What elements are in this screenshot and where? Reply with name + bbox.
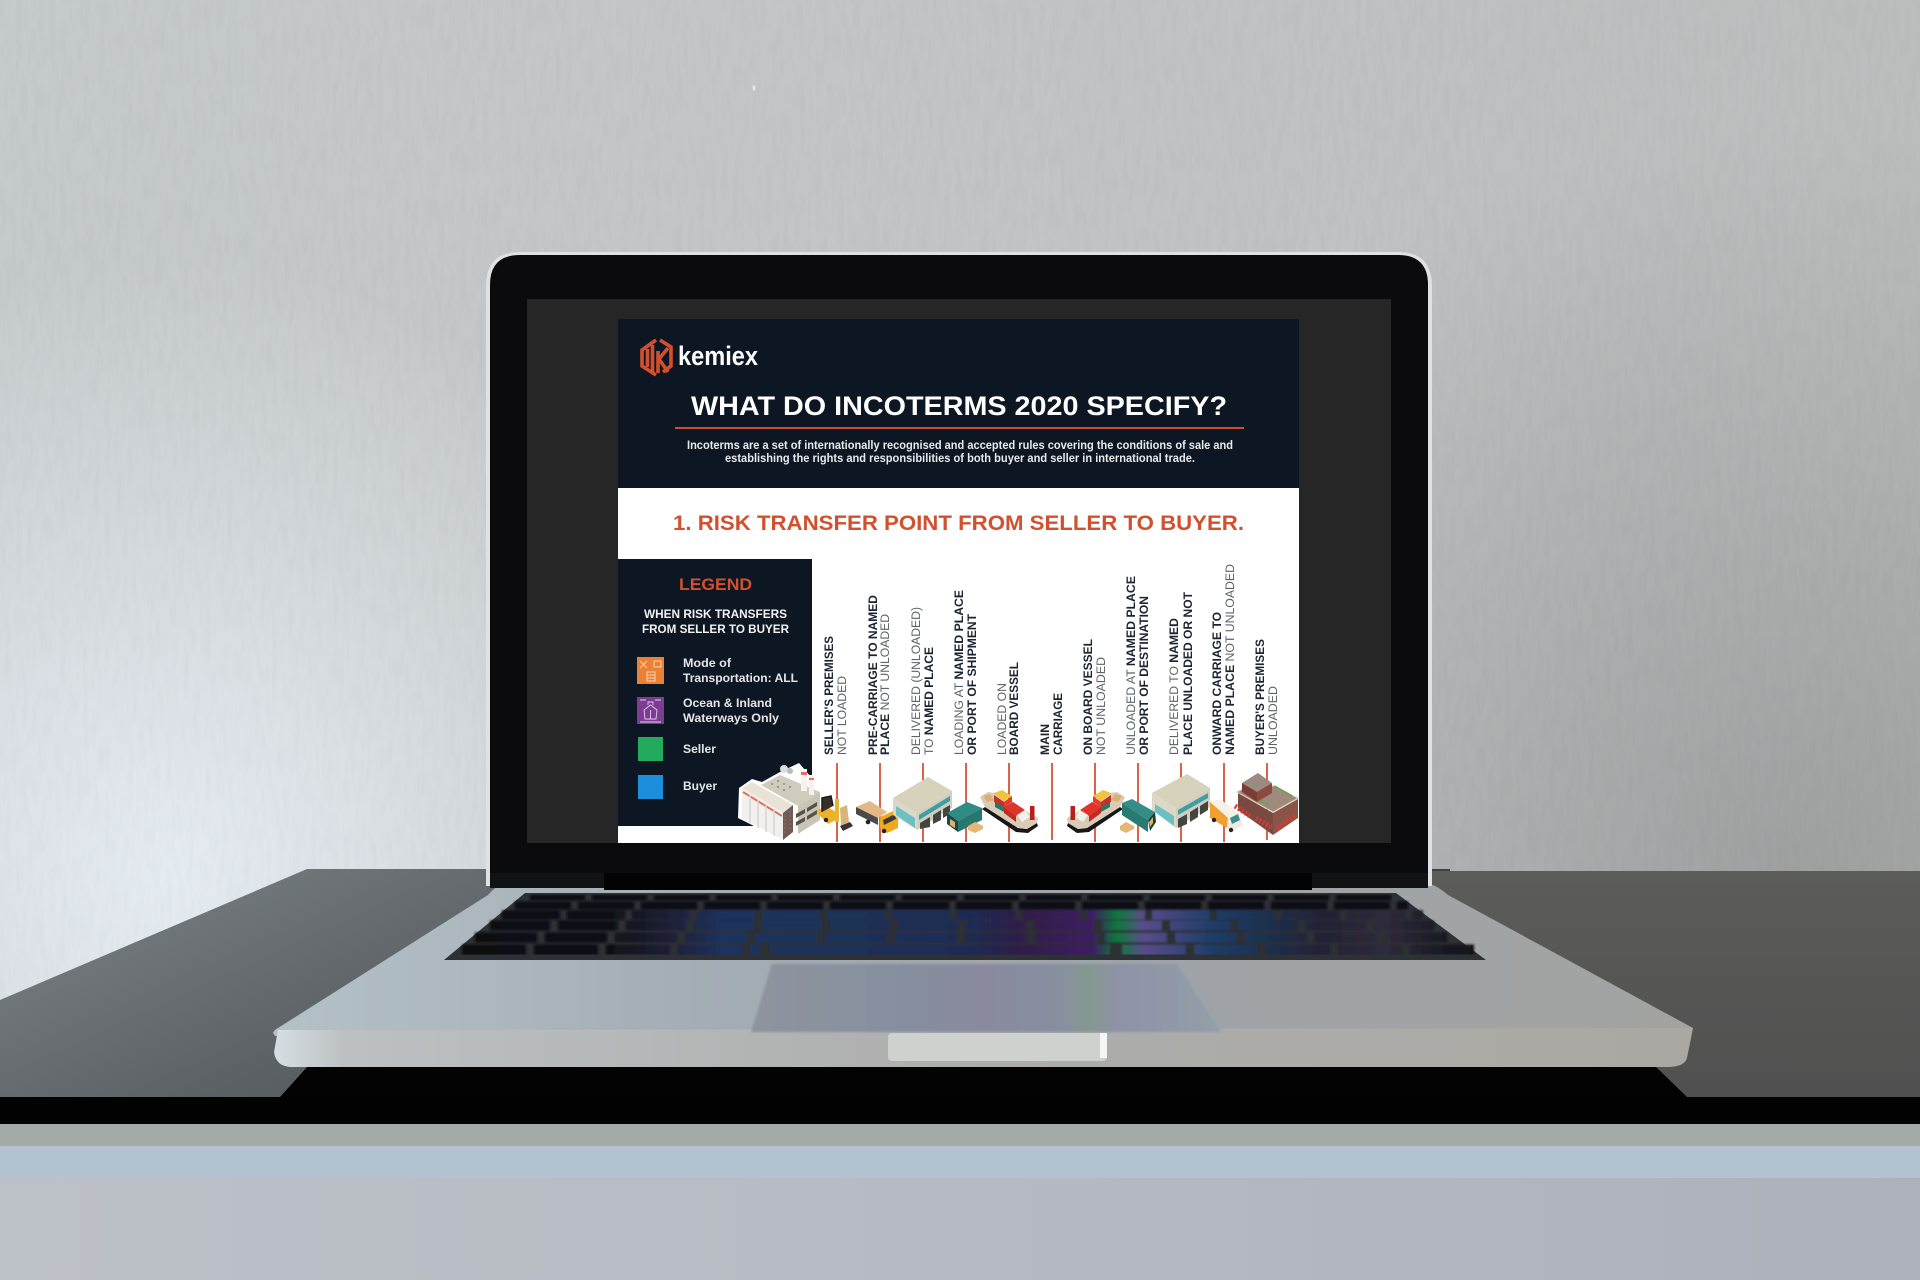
legend subtitle: WHEN RISK TRANSFERS <box>644 607 787 621</box>
illustration: shipping container (destination) <box>1120 799 1156 833</box>
legend subtitle: FROM SELLER TO BUYER <box>642 622 789 636</box>
laptop base <box>273 885 1693 1067</box>
risk transfer marker lines <box>837 763 1267 842</box>
column label: pre-carriage: PRE-CARRIAGE TO NAMED <box>868 595 880 755</box>
display background <box>527 299 1391 843</box>
legend text: all modes <box>683 656 798 685</box>
illustration: buyer's store <box>1235 773 1298 835</box>
column label: loading at named place <box>954 590 979 755</box>
intro text: Incoterms are a set of internationally recognised and accepted rules covering the conditions of sale and <box>687 439 1233 452</box>
column label: buyer's premises <box>1255 639 1280 755</box>
legend panel <box>618 559 812 826</box>
column label: delivered to named place: DELIVERED TO NAMED <box>1169 618 1181 755</box>
legend text: all modes: Transportation: ALL <box>683 671 798 685</box>
illustration: warehouse (origin) <box>893 777 952 830</box>
intro text: establishing the rights and responsibilities of both buyer and seller in international trade. <box>725 452 1195 465</box>
swatch: seller <box>638 737 663 761</box>
desk top <box>0 869 1920 1097</box>
wordmark: kemiex <box>678 341 758 371</box>
legend text: waterways: Waterways Only <box>683 711 779 725</box>
column label: delivered to named place <box>1169 592 1195 755</box>
column label: on board vessel: ON BOARD VESSEL <box>1083 639 1095 755</box>
column label: seller's premises <box>824 636 849 755</box>
logo <box>642 340 758 375</box>
column label: loaded on board <box>997 662 1021 755</box>
icon: ocean and inland waterways <box>637 697 664 724</box>
column label: unloaded at named place <box>1126 576 1151 755</box>
title: WHAT DO INCOTERMS 2020 SPECIFY? <box>691 391 1227 421</box>
illustration: cargo ship (discharge) <box>1067 790 1125 833</box>
icon: kemiex hexagon <box>642 340 671 375</box>
illustration: warehouse (destination) <box>1152 774 1210 828</box>
front notch <box>888 1033 1107 1061</box>
infographic <box>618 319 1299 843</box>
desk front edge and drawer <box>0 1097 1920 1280</box>
screen lid <box>486 252 1432 890</box>
column label: delivered to named place: PLACE UNLOADED OR NOT <box>1183 592 1195 755</box>
column label: loaded on board: BOARD VESSEL <box>1009 662 1021 755</box>
laptop shadow <box>280 1066 1687 1097</box>
illustration: shipping container (origin) <box>947 802 983 833</box>
column label: on board vessel <box>1083 639 1108 755</box>
column label: delivered unloaded: TO NAMED PLACE <box>924 647 936 755</box>
icon: all transport modes <box>637 657 664 684</box>
column label: seller's premises: SELLER'S PREMISES <box>824 636 836 755</box>
column label: delivered unloaded <box>911 607 936 755</box>
legend text: waterways: Ocean & Inland <box>683 696 772 710</box>
header panel <box>618 319 1299 488</box>
trackpad <box>751 964 1221 1032</box>
illustration: forklift <box>818 796 853 831</box>
column label: pre-carriage <box>868 595 892 755</box>
column label: unloaded at named place: UNLOADED AT NAMED PLACE <box>1126 576 1138 755</box>
column label: loading at named place: LOADING AT NAMED PLACE <box>954 590 966 755</box>
keyboard <box>444 893 1486 960</box>
title underline <box>675 427 1244 429</box>
column label: onward carriage <box>1212 564 1237 755</box>
swatch: buyer <box>638 775 663 799</box>
column label: onward carriage: NAMED PLACE NOT UNLOADED <box>1225 564 1237 755</box>
column label: main carriage: MAIN <box>1040 724 1052 755</box>
column label: delivered unloaded: DELIVERED (UNLOADED) <box>911 607 923 755</box>
column label: on board vessel: NOT UNLOADED <box>1096 657 1108 755</box>
legend text: buyer: Buyer <box>683 779 717 793</box>
legend text: all modes: Mode of <box>683 656 732 670</box>
column label: unloaded at named place: OR PORT OF DESTINATION <box>1139 596 1151 755</box>
column label: buyer's premises: BUYER'S PREMISES <box>1255 639 1267 755</box>
legend text: waterways <box>683 696 779 725</box>
section heading: 1. RISK TRANSFER POINT FROM SELLER TO BUYER. <box>673 511 1244 535</box>
legend subtitle <box>642 607 789 636</box>
column label: loaded on board: LOADED ON <box>997 683 1009 755</box>
column label: seller's premises: NOT LOADED <box>837 676 849 755</box>
column label: main carriage: CARRIAGE <box>1053 693 1065 755</box>
illustration: delivery van <box>1210 799 1243 832</box>
column label: pre-carriage: PLACE NOT UNLOADED <box>880 614 892 755</box>
legend heading: LEGEND <box>679 575 752 594</box>
column label: onward carriage: ONWARD CARRIAGE TO <box>1212 612 1224 755</box>
intro text <box>687 439 1233 465</box>
column label: main carriage <box>1040 693 1065 755</box>
white content panel <box>618 488 1299 843</box>
column label: buyer's premises: UNLOADED <box>1268 686 1280 755</box>
background wall <box>0 0 1920 1010</box>
illustration: factory <box>738 763 822 842</box>
laptop <box>273 252 1693 1097</box>
column label: loading at named place: OR PORT OF SHIPMENT <box>967 614 979 755</box>
illustration: cargo ship (loading) <box>980 790 1038 833</box>
illustration: delivery truck <box>856 801 898 833</box>
legend text: seller: Seller <box>683 742 716 756</box>
